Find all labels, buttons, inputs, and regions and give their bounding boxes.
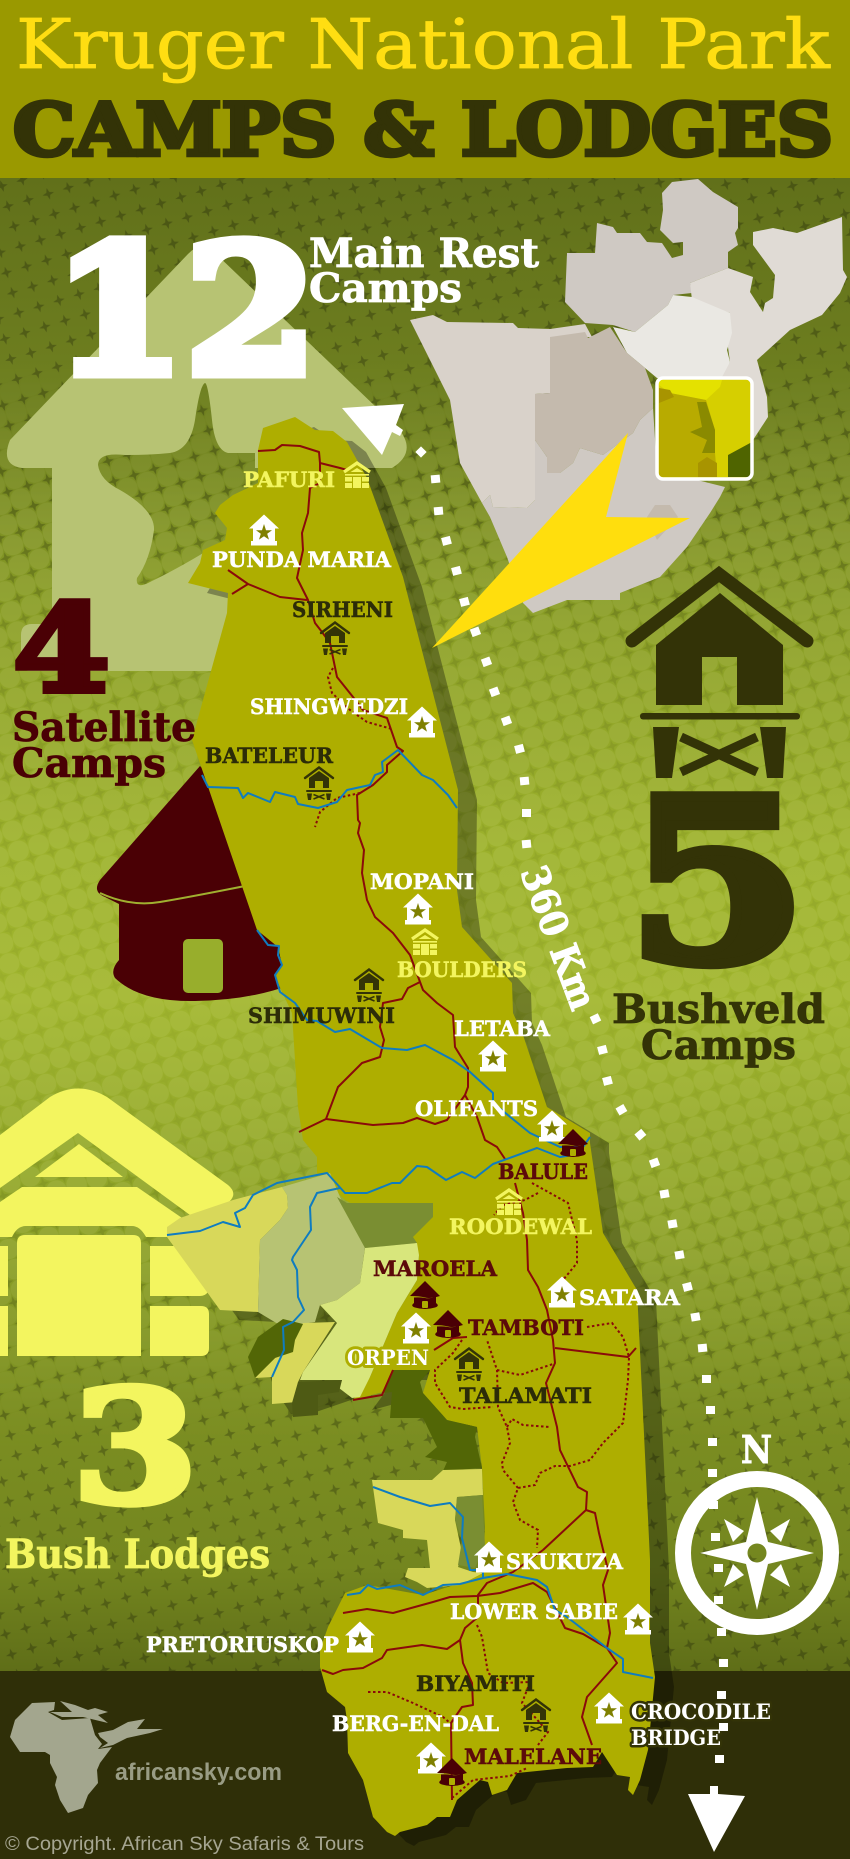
label: Boulders: BOULDERS — [397, 957, 527, 982]
icon: Shimuwini bushveld camp — [355, 970, 383, 1002]
map: western border reserves — [167, 1173, 485, 1588]
heading: Bushveld Camps: Camps — [641, 1022, 796, 1069]
label: Bateleur: BATELEUR — [205, 743, 334, 768]
icon: Mopani camp — [403, 894, 433, 924]
icon: Roodewal lodge — [496, 1190, 522, 1215]
icon: Shingwedzi camp — [407, 706, 437, 738]
icon: large maroon satellite camp hut — [97, 766, 290, 1001]
label: Olifants: OLIFANTS — [415, 1096, 538, 1121]
big number 3: 3 — [72, 1356, 198, 1539]
compass — [683, 1479, 831, 1627]
label: Biyamiti: BIYAMITI — [416, 1671, 535, 1696]
arrow: north end of distance line — [342, 404, 404, 455]
icon: Bateleur bushveld camp — [305, 768, 333, 800]
icon: Biyamiti bushveld camp — [522, 1700, 550, 1732]
heading: Satellite Camps — [12, 704, 196, 787]
label: Shimuwini: SHIMUWINI — [248, 1003, 395, 1028]
label: Lower Sabie: LOWER SABIE — [450, 1599, 618, 1624]
icon: large bushveld camp on stilts — [632, 574, 807, 778]
footer band — [0, 1671, 850, 1859]
map: southern Africa locator — [410, 179, 847, 613]
icon: Berg-en-Dal camp — [416, 1742, 446, 1774]
label: Shingwedzi: SHINGWEDZI — [250, 694, 408, 719]
icon: Tamboti satellite camp — [433, 1310, 463, 1338]
icon: Olifants camp — [537, 1110, 567, 1142]
header band — [0, 0, 850, 178]
label: Skukuza: SKUKUZA — [506, 1549, 624, 1574]
label: Pretoriuskop: PRETORIUSKOP — [146, 1632, 339, 1657]
heading: Bushveld Camps — [612, 986, 825, 1069]
icon: Malelane satellite camp — [437, 1758, 467, 1786]
label: 360 Km distance: 360 Km — [512, 859, 606, 1016]
heading: Main Rest Camps: Main Rest — [309, 230, 540, 277]
big number 4: 4 — [13, 577, 110, 720]
icon: Letaba camp — [478, 1040, 508, 1072]
big number 12: 12 — [53, 206, 317, 415]
label: Crocodile Bridge — [631, 1699, 771, 1750]
label: Satara: SATARA — [579, 1285, 681, 1310]
icon: Punda Maria camp — [249, 514, 279, 546]
label: Sirheni: SIRHENI — [292, 597, 393, 622]
label: Malelane: MALELANE — [464, 1744, 602, 1769]
heading: Main Rest Camps: Camps — [309, 265, 462, 312]
icon: Satara camp — [547, 1276, 577, 1308]
website address: africansky.com — [115, 1759, 282, 1786]
logo: Africa silhouette with birds — [10, 1701, 163, 1813]
icon: Sirheni bushveld camp — [321, 622, 349, 655]
river network — [167, 750, 653, 1678]
icon: Lower Sabie camp — [623, 1604, 653, 1634]
icon: Balule satellite camp — [558, 1129, 588, 1157]
label: Punda Maria: PUNDA MARIA — [212, 547, 392, 572]
big number 5: 5 — [626, 750, 808, 1015]
label: Roodewal: ROODEWAL — [449, 1214, 592, 1239]
label: Berg-en-Dal: BERG-EN-DAL — [332, 1711, 499, 1736]
icon: Maroela satellite camp — [410, 1281, 440, 1309]
map shadow — [186, 427, 674, 1846]
label: Maroela: MAROELA — [373, 1256, 498, 1281]
heading: Bush Lodges: Bush Lodges — [5, 1531, 270, 1578]
heading: Satellite Camps: Camps — [12, 740, 166, 787]
icon: Orpen camp — [401, 1312, 431, 1344]
map inset: highlighted Kruger area — [657, 378, 752, 479]
icon: large pale main rest camp house with star cut-out — [7, 246, 407, 671]
title: Camps and Lodges: CAMPS & LODGES — [13, 87, 833, 172]
label: Mopani: MOPANI — [370, 869, 474, 894]
icon: Talamati bushveld camp — [455, 1348, 483, 1381]
icon: Boulders lodge — [412, 930, 438, 955]
icon: Pafuri lodge — [344, 463, 370, 488]
label: Crocodile Bridge: CROCODILE — [631, 1699, 771, 1724]
label: Crocodile Bridge: BRIDGE — [631, 1725, 721, 1750]
dotted distance line — [415, 446, 728, 1763]
label: Tamboti: TAMBOTI — [468, 1315, 584, 1340]
label: Balule: BALULE — [498, 1159, 588, 1184]
icon: Pretoriuskop camp — [345, 1622, 375, 1652]
label: Talamati: TALAMATI — [459, 1383, 592, 1408]
label: Pafuri: PAFURI — [243, 467, 335, 492]
map: Kruger National Park main body — [188, 417, 655, 1836]
label: Letaba: LETABA — [454, 1016, 551, 1041]
callout bolt pointing from locator to park — [432, 433, 690, 648]
road network — [228, 445, 636, 1800]
label: north marker: N — [741, 1427, 772, 1472]
icon: Crocodile Bridge camp — [594, 1692, 624, 1724]
heading: Satellite Camps: Satellite — [12, 704, 196, 751]
heading: Main Rest Camps — [309, 230, 540, 312]
title: Kruger National Park: Kruger National Park — [16, 6, 831, 85]
arrow: south end of distance line — [688, 1786, 745, 1852]
label: Orpen: ORPEN — [347, 1345, 429, 1370]
icon: Skukuza camp — [474, 1542, 504, 1572]
copyright line: © Copyright. African Sky Safaris & Tours — [5, 1834, 364, 1855]
icon: large yellow bush lodge — [0, 1088, 233, 1356]
heading: Bushveld Camps: Bushveld — [612, 986, 825, 1033]
